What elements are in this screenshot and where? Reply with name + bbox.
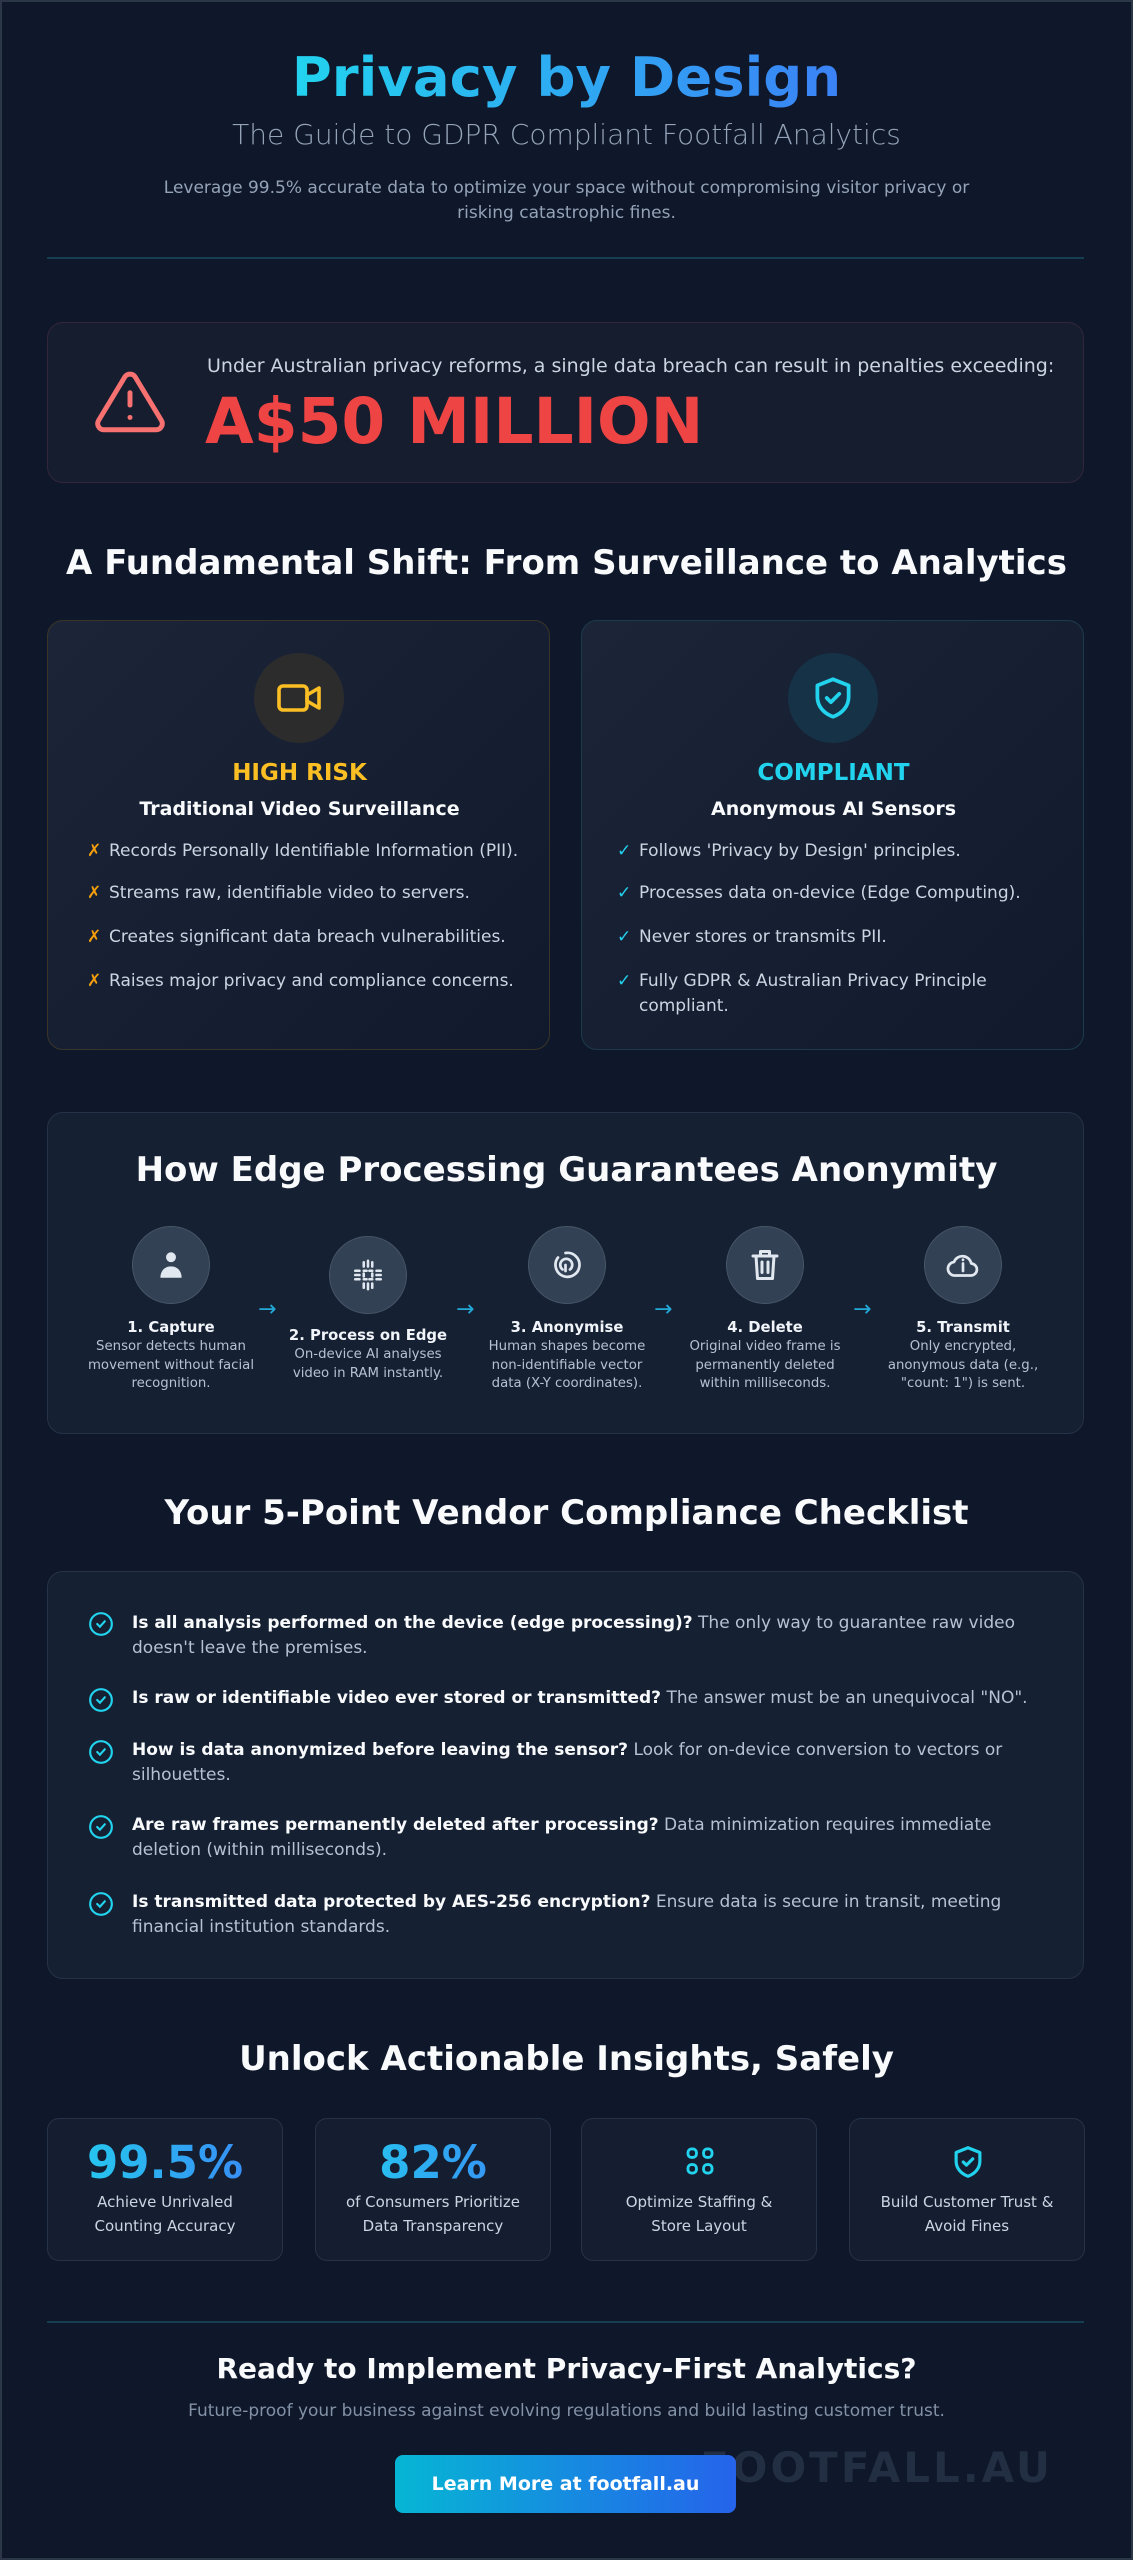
step 3: 3. Anonymise [511,1319,623,1336]
bullets: ✗ [87,971,101,991]
step 4 [689,1226,841,1391]
stat: consumers: of Consumers Prioritize [346,2193,520,2211]
bullets: Fully GDPR & Australian Privacy Principle compliant. [639,971,987,1016]
heading: checklist: Your 5-Point Vendor Compliance Checklist [164,1493,969,1533]
stat: consumers [315,2118,551,2261]
checklist items: How is data anonymized before leaving the sensor? Look for on-device conversion to vectors or silhouettes. [132,1740,1002,1785]
label: high risk: HIGH RISK [232,760,367,786]
icon: shield check [788,653,878,743]
bullets: ✗ [87,883,101,903]
stat: accuracy [47,2118,283,2261]
arrow: → [853,1297,871,1322]
arrow: → [654,1297,672,1322]
step 1 [88,1226,254,1391]
panel: edge processing [47,1112,1084,1434]
bullets: ✓ [617,883,631,903]
panel: high risk [47,620,550,1050]
bullets: Raises major privacy and compliance concerns. [109,971,514,991]
stat: trust: Avoid Fines [925,2217,1009,2235]
step 4: Original video frame is permanently deleted within milliseconds. [689,1339,841,1391]
checklist items: Is all analysis performed on the device (edge processing)? The only way to guarantee raw video doesn't leave the premises. [132,1613,1015,1658]
subtitle: Traditional Video Surveillance [139,798,460,820]
icon: shield [954,2146,982,2178]
cta heading: Ready to Implement Privacy-First Analytics? [216,2352,917,2385]
button [395,2455,736,2513]
bullets: Records Personally Identifiable Information (PII). [109,841,518,861]
stat: consumers: 82% [379,2136,487,2189]
stat: accuracy: Achieve Unrivaled [97,2193,233,2211]
stat: optimize [581,2118,817,2261]
bullets: Never stores or transmits PII. [639,927,887,947]
stat: accuracy: 99.5% [87,2136,243,2189]
stat: optimize: Store Layout [651,2217,747,2235]
stat: accuracy: Counting Accuracy [94,2217,236,2235]
big number: A$50 MILLION [205,385,703,458]
checklist items [89,1612,1028,1937]
panel: compliant [581,620,1084,1050]
step 1: 1. Capture [127,1319,215,1336]
heading: insights: Unlock Actionable Insights, Safely [239,2039,894,2079]
step 5 [888,1226,1038,1391]
subtitle: The Guide to GDPR Compliant Footfall Analytics [232,118,901,151]
intro text: Leverage 99.5% accurate data to optimize your space without compromising visitor privacy or risking catastrophic fines. [164,178,969,223]
bullets: Processes data on-device (Edge Computing). [639,883,1021,903]
step 3 [489,1226,645,1391]
stat: consumers: Data Transparency [363,2217,503,2235]
icon: grid [686,2148,714,2174]
watermark: FOOTFALL.AU [700,2443,1053,2492]
step 3: Human shapes become non-identifiable vector data (X-Y coordinates). [489,1339,645,1391]
label: compliant: COMPLIANT [757,760,910,786]
subtitle: Anonymous AI Sensors [711,798,956,820]
bullets: ✗ [87,927,101,947]
icon: video camera [254,653,344,743]
bullets: ✓ [617,971,631,991]
step 2 [289,1236,447,1380]
heading: How Edge Processing Guarantees Anonymity [136,1150,997,1190]
alert text: Under Australian privacy reforms, a single data breach can result in penalties exceeding: [207,355,1054,377]
checklist items: Is transmitted data protected by AES-256 encryption? Ensure data is secure in transit, meeting financial institution standards. [132,1892,1001,1937]
panel: fine alert [47,322,1084,483]
step 2: On-device AI analyses video in RAM instantly. [293,1347,443,1380]
bullets: Follows 'Privacy by Design' principles. [639,841,961,861]
icon: warning triangle [95,372,165,432]
step 1: Sensor detects human movement without facial recognition. [88,1339,254,1391]
bullets [617,841,1021,1016]
bullets [87,841,518,991]
heading: fundamental shift: A Fundamental Shift: From Surveillance to Analytics [66,543,1067,583]
bullets: ✓ [617,927,631,947]
step 5: 5. Transmit [916,1319,1010,1336]
checklist items: Are raw frames permanently deleted after processing? Data minimization requires immediate deletion (within milliseconds). [132,1815,991,1860]
title: Privacy by Design [292,45,841,109]
step 4: 4. Delete [727,1319,803,1336]
bullets: ✓ [617,841,631,861]
bullets: Creates significant data breach vulnerabilities. [109,927,506,947]
arrow: → [258,1297,276,1322]
stat: trust [849,2118,1085,2261]
cta text: Future-proof your business against evolving regulations and build lasting customer trust. [188,2401,945,2421]
arrow: → [456,1297,474,1322]
step 2: 2. Process on Edge [289,1327,447,1344]
bullets: Streams raw, identifiable video to servers. [109,883,470,903]
stat: optimize: Optimize Staffing & [626,2193,772,2211]
stat: trust: Build Customer Trust & [881,2193,1053,2211]
bullets: ✗ [87,841,101,861]
checklist items: Is raw or identifiable video ever stored or transmitted? The answer must be an unequivocal "NO". [132,1688,1028,1708]
panel: checklist [47,1571,1084,1979]
button: Learn More at footfall.au [432,2473,699,2495]
step 5: Only encrypted, anonymous data (e.g., "count: 1") is sent. [888,1339,1038,1391]
